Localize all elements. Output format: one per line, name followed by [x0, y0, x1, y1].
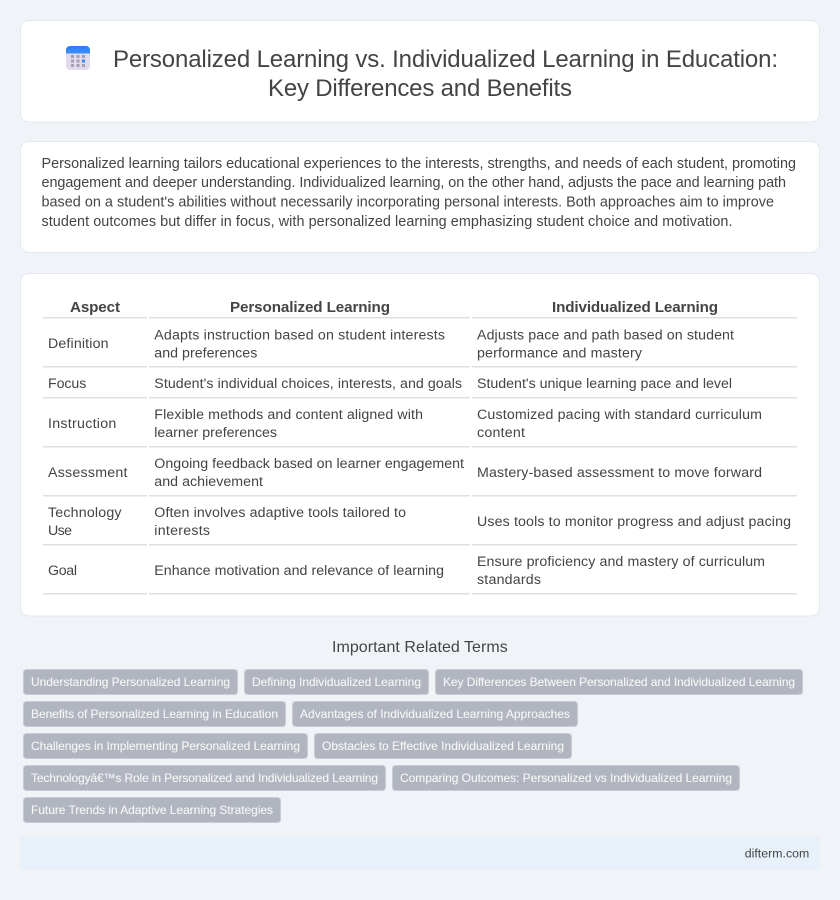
- tag: [392, 766, 740, 790]
- panel: comparison table: [20, 274, 820, 616]
- table header row: Aspect: [70, 299, 120, 316]
- table row: focus: Student's individual choices, interests, and goals: [154, 376, 462, 392]
- table row: focus: Focus: [48, 376, 86, 392]
- table row: definition: and preferences: [154, 346, 257, 362]
- table row: assessment: [48, 456, 762, 490]
- tag: Advantages of Individualized Learning Approaches: [300, 707, 570, 721]
- table row: technology use: Uses tools to monitor progress and adjust pacing: [477, 514, 791, 530]
- table row: instruction: content: [477, 425, 525, 441]
- table row: assessment: and achievement: [154, 474, 263, 490]
- table header row: Personalized Learning: [230, 299, 390, 316]
- tag: [436, 670, 802, 694]
- table row: instruction: Customized pacing with standard curriculum: [477, 407, 762, 423]
- footer: site name: difterm.com: [745, 846, 809, 860]
- title: [113, 46, 778, 102]
- table row: goal: Ensure proficiency and mastery of curriculum: [477, 554, 765, 570]
- table row: goal: Enhance motivation and relevance of learning: [154, 563, 444, 579]
- table row lines: [43, 317, 797, 594]
- table row: definition: performance and mastery: [477, 346, 643, 362]
- table row: instruction: learner preferences: [154, 425, 277, 441]
- tag: Obstacles to Effective Individualized Learning: [322, 739, 564, 753]
- table row: technology use: [48, 505, 791, 539]
- table header row: [70, 299, 718, 316]
- tag: [314, 734, 572, 758]
- table row: technology use: Technology: [48, 505, 122, 521]
- title: Key Differences and Benefits: [268, 75, 572, 102]
- table header row: Individualized Learning: [552, 299, 718, 316]
- table row: definition: Definition: [48, 336, 108, 352]
- text block: introduction paragraph: Personalized learning tailors educational experiences to the interests, strengths, and needs of each student, promoting: [42, 156, 796, 172]
- table row: instruction: Flexible methods and content aligned with: [154, 407, 423, 423]
- table row: assessment: Ongoing feedback based on learner engagement: [154, 456, 464, 472]
- table row: technology use: interests: [154, 523, 210, 539]
- table row: technology use: Use: [48, 523, 72, 539]
- tag: Challenges in Implementing Personalized Learning: [31, 739, 300, 753]
- table row: goal: Goal: [48, 563, 77, 579]
- table row: focus: [48, 376, 732, 392]
- table row: definition: Adjusts pace and path based on student: [477, 328, 734, 344]
- text block: introduction paragraph: engagement and deeper understanding. Individualized learning, on the other hand, adjusts the pace and learning path: [42, 175, 786, 191]
- table row: focus: Student's unique learning pace and level: [477, 376, 732, 392]
- table row: instruction: Instruction: [48, 416, 116, 432]
- tag: [24, 798, 280, 822]
- title: Personalized Learning vs. Individualized Learning in Education:: [113, 46, 778, 73]
- table row: definition: [48, 328, 734, 362]
- tag: [24, 670, 238, 694]
- tag: Defining Individualized Learning: [252, 675, 421, 689]
- table row: assessment: Assessment: [48, 465, 128, 481]
- text block: introduction paragraph: based on a student's abilities without necessarily incorporating personal interests. Both approaches aim to improve: [42, 194, 774, 210]
- tag: [24, 734, 308, 758]
- table row: technology use: Often involves adaptive tools tailored to: [154, 505, 406, 521]
- tag: Comparing Outcomes: Personalized vs Individualized Learning: [400, 771, 732, 785]
- tag: Benefits of Personalized Learning in Education: [31, 707, 278, 721]
- tag: Understanding Personalized Learning: [31, 675, 230, 689]
- heading: important related terms: Important Related Terms: [332, 639, 508, 656]
- tag: Technologyâ€™s Role in Personalized and Individualized Learning: [31, 771, 378, 785]
- tag: [244, 670, 428, 694]
- table row: assessment: Mastery-based assessment to move forward: [477, 465, 762, 481]
- text block: introduction paragraph: student outcomes but differ in focus, with personalized learning emphasizing student choice and motivation.: [42, 214, 732, 230]
- table row: definition: Adapts instruction based on student interests: [154, 328, 445, 344]
- icon: calendar: [66, 46, 90, 70]
- tag: Future Trends in Adaptive Learning Strategies: [31, 803, 273, 817]
- panel: introduction: [20, 142, 820, 252]
- text block: introduction paragraph: [42, 156, 796, 230]
- table row: goal: standards: [477, 572, 541, 588]
- tag group: related terms: [24, 670, 802, 822]
- footer: [20, 836, 820, 870]
- table row: goal: [48, 554, 765, 588]
- tag: Key Differences Between Personalized and Individualized Learning: [443, 675, 795, 689]
- tag: [24, 702, 286, 726]
- tag: [292, 702, 578, 726]
- table row: instruction: [48, 407, 762, 441]
- tag: [24, 766, 386, 790]
- panel: header: [20, 20, 820, 122]
